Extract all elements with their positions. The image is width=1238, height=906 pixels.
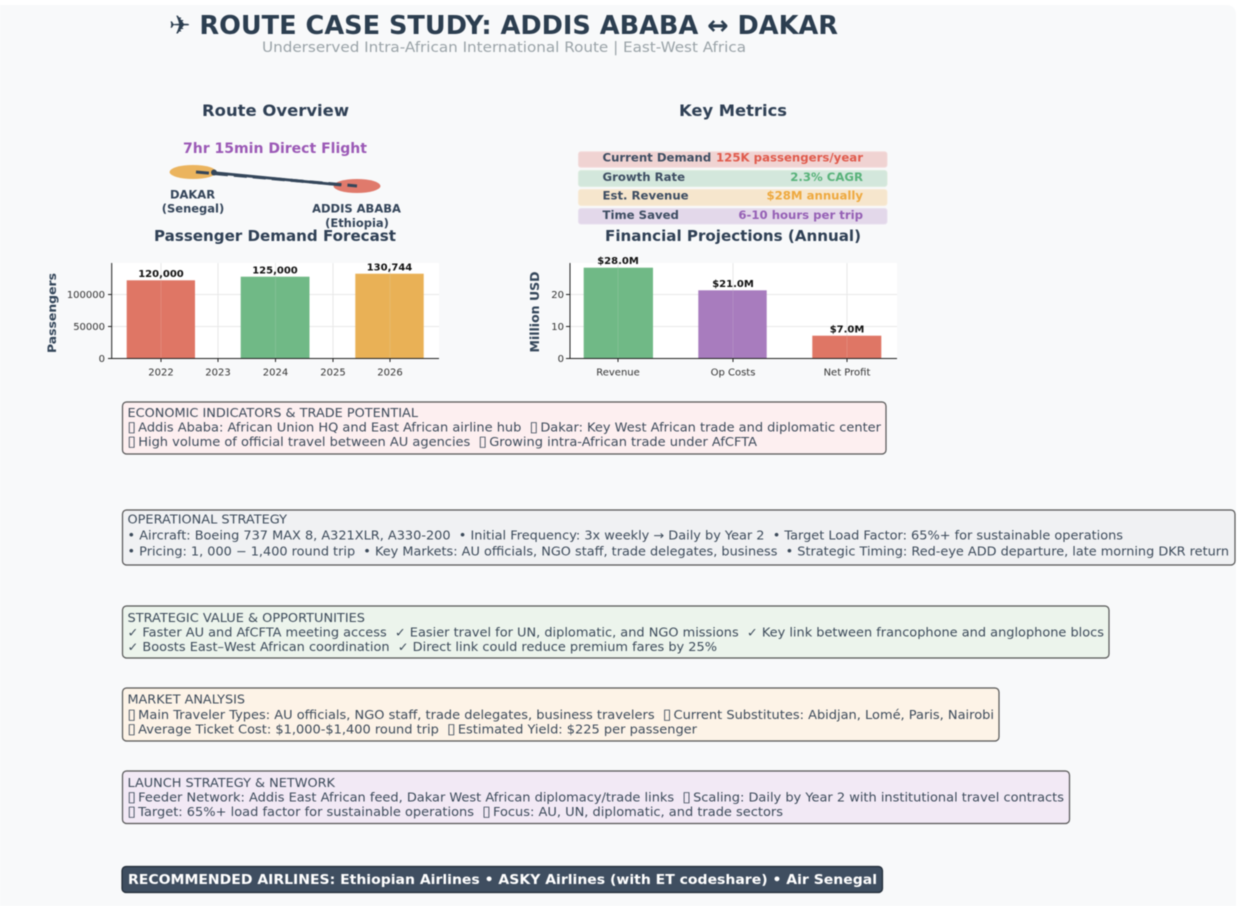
value labels: $28.0M	[597, 256, 639, 267]
panel: economic indicators	[122, 402, 886, 454]
heading: passenger demand forecast: Passenger Demand Forecast	[154, 227, 396, 245]
panel: key metrics	[578, 101, 887, 224]
text line: ▯ Target: 65%+ load factor for sustainable operations ▯ Focus: AU, UN, diplomatic, and trade sectors	[128, 804, 783, 820]
panel: financial projections	[528, 227, 897, 378]
x axis labels: Revenue	[596, 368, 640, 378]
text line: ▯ Main Traveler Types: AU officials, NGO staff, trade delegates, business travelers ▯ Current Substitutes: Abidjan, Lomé, Paris, Nairobi	[128, 707, 994, 723]
value labels: 130,744	[367, 262, 412, 273]
value labels	[138, 262, 412, 280]
x axis labels: 2026	[377, 368, 403, 378]
metric: current demand: 125K passengers/year	[716, 150, 863, 164]
label: Dakar: (Senegal)	[162, 202, 224, 216]
flight duration label: 7hr 15min Direct Flight	[183, 141, 367, 157]
value labels: $21.0M	[712, 279, 754, 290]
panel: launch strategy	[122, 771, 1070, 824]
y axis labels: 100000	[67, 290, 105, 301]
axes	[566, 263, 897, 362]
heading: operational strategy: OPERATIONAL STRATEGY	[128, 512, 288, 526]
heading: strategic value: STRATEGIC VALUE & OPPORTUNITIES	[128, 611, 365, 625]
y axis title: Million USD	[528, 271, 542, 352]
recommended airlines text: RECOMMENDED AIRLINES: Ethiopian Airlines • ASKY Airlines (with ET codeshare) • Air Senegal	[128, 872, 877, 888]
x axis labels: 2022	[148, 368, 174, 378]
text line: ▯ Feeder Network: Addis East African feed, Dakar West African diplomacy/trade links ▯ Scaling: Daily by Year 2 with institutional travel contracts	[128, 790, 1064, 806]
metric: estimated revenue: $28M annually	[767, 188, 863, 202]
bar: 2022	[127, 280, 195, 358]
y axis labels: 0	[558, 354, 564, 365]
heading: launch strategy: LAUNCH STRATEGY & NETWORK	[128, 776, 336, 790]
y axis labels	[551, 290, 564, 365]
heading: economic indicators: ECONOMIC INDICATORS & TRADE POTENTIAL	[128, 406, 418, 420]
panel: route overview	[162, 101, 401, 230]
x axis labels: Op Costs	[711, 368, 755, 378]
text line: ▯ Addis Ababa: African Union HQ and East African airline hub ▯ Dakar: Key West African trade and diplomatic center	[128, 420, 881, 436]
value labels: 120,000	[138, 269, 184, 280]
metric: estimated revenue	[578, 188, 887, 206]
metric: time saved	[578, 208, 887, 224]
text line: ✓ Boosts East–West African coordination ✓ Direct link could reduce premium fares by 25%	[128, 640, 717, 654]
label: Addis Ababa: ADDIS ABABA	[312, 202, 401, 216]
y axis title: Passengers	[45, 273, 59, 353]
label: Dakar: DAKAR	[170, 188, 215, 202]
value labels: $7.0M	[830, 324, 864, 335]
label: Dakar	[162, 188, 224, 216]
subtitle: Underserved Intra-African International Route | East-West Africa	[262, 40, 746, 56]
heading: financial projections: Financial Projections (Annual)	[605, 227, 861, 245]
bar: revenue	[584, 268, 653, 358]
y axis labels	[67, 290, 105, 365]
x axis labels: 2024	[263, 368, 288, 378]
bar: net profit	[812, 336, 881, 358]
marker: Addis Ababa	[334, 179, 380, 193]
text line: ▯ Average Ticket Cost: $1,000-$1,400 round trip ▯ Estimated Yield: $225 per passenger	[128, 722, 697, 738]
metric: current demand	[578, 150, 887, 167]
label: Addis Ababa: (Ethiopia)	[325, 216, 389, 230]
bar chart: passengers by year	[45, 262, 439, 378]
metric: growth rate: 2.3% CAGR	[790, 170, 863, 184]
metric: time saved: 6-10 hours per trip	[738, 208, 863, 222]
metric: time saved: Time Saved	[602, 208, 679, 222]
marker: Dakar	[170, 165, 216, 179]
bar: op costs	[698, 290, 767, 358]
x axis labels	[596, 368, 870, 378]
y axis labels: 0	[99, 354, 105, 365]
value labels: 125,000	[252, 265, 298, 276]
x axis labels	[148, 368, 403, 378]
axes	[108, 263, 439, 362]
y axis labels: 20	[551, 290, 564, 301]
bar: 2024	[241, 277, 310, 358]
panel: operational strategy	[122, 510, 1235, 565]
text line: • Aircraft: Boeing 737 MAX 8, A321XLR, A330-200 • Initial Frequency: 3x weekly → Daily by Year 2 • Target Load Factor: 65%+ for sustainable operations	[128, 528, 1123, 542]
bar chart: annual financials	[528, 256, 897, 378]
value labels	[597, 256, 864, 335]
title: ✈ ROUTE CASE STUDY: ADDIS ABABA ↔ DAKAR	[169, 11, 838, 41]
y axis labels: 10	[551, 322, 564, 333]
panel: recommended airlines	[122, 866, 882, 892]
heading: key metrics: Key Metrics	[679, 101, 787, 120]
label: Addis Ababa	[312, 202, 401, 230]
metric: growth rate	[578, 170, 887, 186]
heading: route overview: Route Overview	[202, 101, 349, 120]
text line: ✓ Faster AU and AfCFTA meeting access ✓ Easier travel for UN, diplomatic, and NGO missions ✓ Key link between francophone and anglophone blocs	[128, 625, 1104, 639]
panel: market analysis	[122, 688, 999, 741]
metric: estimated revenue: Est. Revenue	[602, 188, 689, 202]
heading: market analysis: MARKET ANALYSIS	[128, 692, 245, 706]
text line: • Pricing: 1, 000 − 1,400 round trip • Key Markets: AU officials, NGO staff, trade delegates, business • Strategic Timing: Red-eye ADD departure, late morning DKR return	[128, 545, 1229, 559]
metric: current demand: Current Demand	[602, 150, 711, 164]
y axis labels: 50000	[73, 322, 105, 333]
panel: passenger demand forecast	[45, 227, 439, 378]
panel: strategic value	[122, 606, 1109, 658]
x axis labels: 2023	[205, 368, 231, 378]
route line	[196, 170, 357, 186]
metric: growth rate: Growth Rate	[602, 170, 685, 184]
x axis labels: 2025	[320, 368, 346, 378]
bar: 2026	[355, 274, 424, 358]
x axis labels: Net Profit	[824, 368, 870, 378]
text line: ▯ High volume of official travel between AU agencies ▯ Growing intra-African trade under AfCFTA	[128, 434, 758, 450]
